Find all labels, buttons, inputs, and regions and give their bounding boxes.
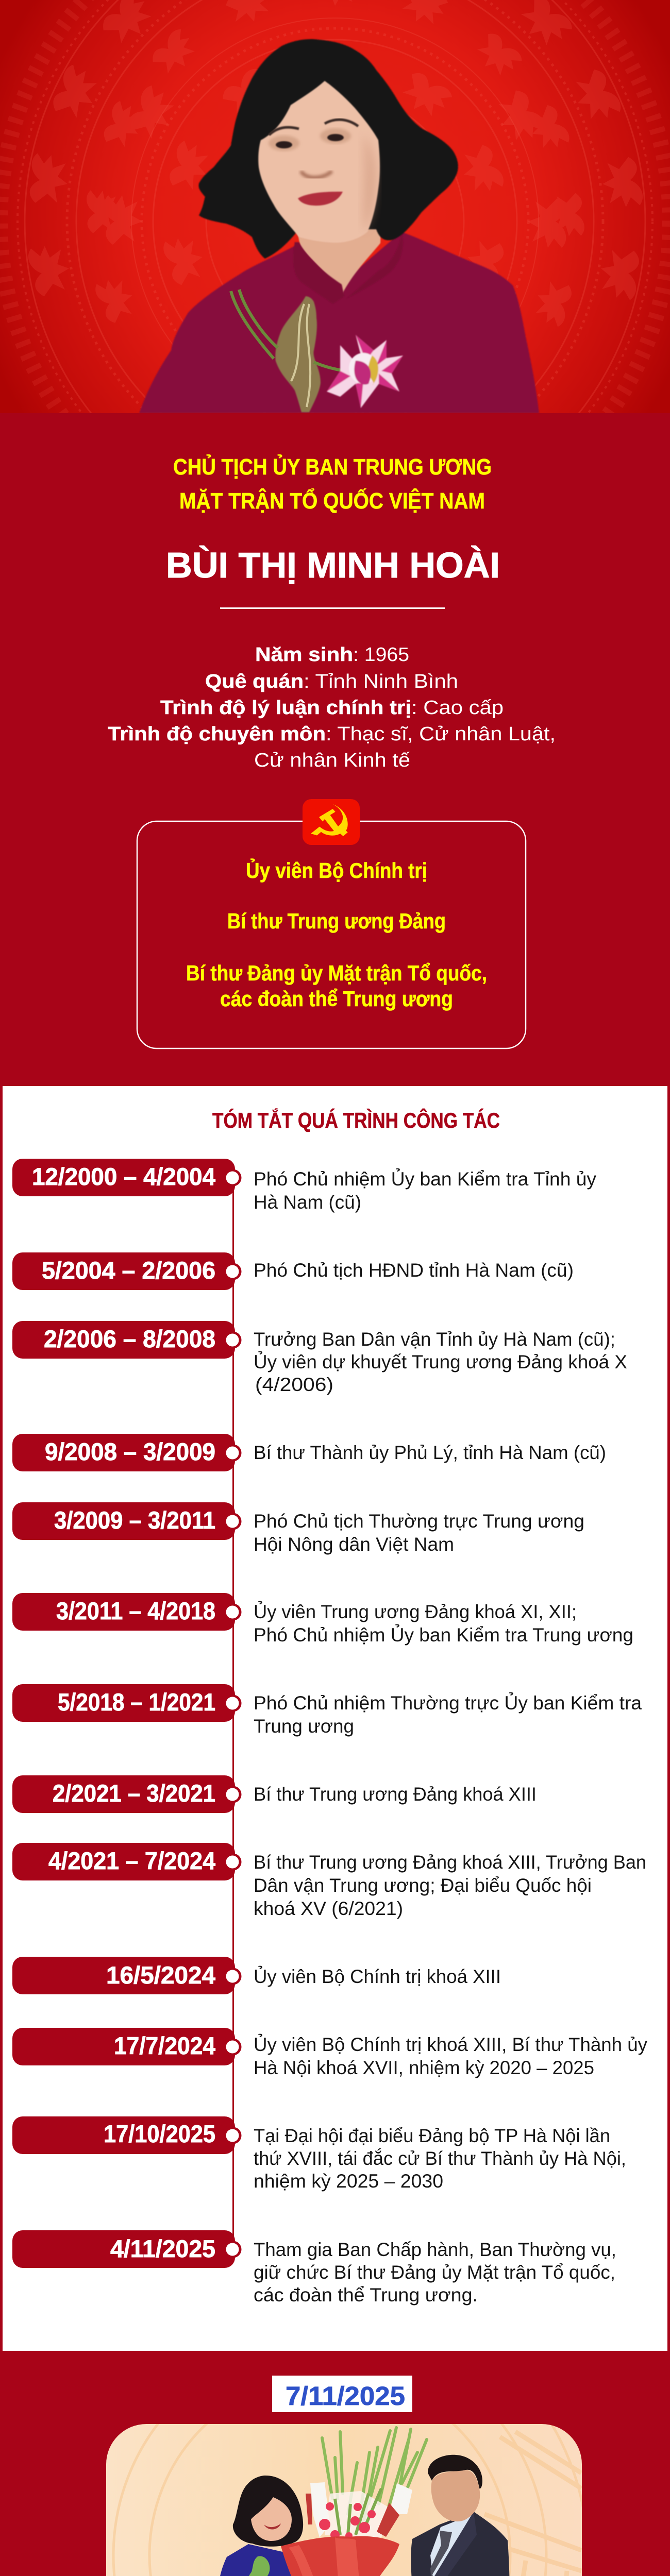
red ribbon wrap	[306, 2494, 399, 2537]
timeline entry 3: Ủy viên dự khuyết Trung ương Đảng khoá X	[254, 1351, 627, 1372]
timeline entry 2: Phó Chủ tịch HĐND tỉnh Hà Nam (cũ)	[254, 1260, 574, 1281]
timeline entry 13: giữ chức Bí thư Đảng ủy Mặt trận Tổ quốc,	[254, 2262, 615, 2283]
timeline entry 3: Trưởng Ban Dân vận Tỉnh ủy Hà Nam (cũ);	[254, 1329, 615, 1350]
date badge: 7/11/2025	[286, 2381, 405, 2411]
timeline entry 9: Dân vận Trung ương; Đại biểu Quốc hội	[254, 1875, 592, 1896]
timeline entry 7	[12, 1684, 642, 1737]
hero portrait panel	[0, 0, 670, 413]
timeline entry 11: Hà Nội khoá XVII, nhiệm kỳ 2020 – 2025	[254, 2057, 594, 2078]
eye sockets	[269, 135, 299, 151]
personal info block: Quê quán	[205, 671, 304, 692]
hair	[199, 39, 458, 259]
timeline entry 8: 2/2021 – 3/2021	[53, 1780, 215, 1807]
gladiolus stems	[322, 2428, 427, 2524]
collar	[293, 232, 403, 304]
personal info block: Trình độ chuyên môn	[108, 723, 326, 745]
man in suit	[355, 2455, 510, 2576]
panel: party positions: Bí thư Trung ương Đảng	[227, 909, 446, 933]
lotus flower	[327, 335, 403, 408]
title: position	[173, 453, 492, 514]
photo: flower presentation	[106, 2424, 582, 2576]
embroidered leaf	[275, 296, 321, 412]
bronze drum pattern	[0, 0, 670, 413]
nose	[301, 171, 332, 178]
timeline entry 13	[12, 2230, 616, 2306]
timeline entry 12: nhiệm kỳ 2025 – 2030	[254, 2171, 443, 2192]
timeline entry 9: 4/2021 – 7/2024	[48, 1847, 215, 1874]
lapel	[433, 2512, 477, 2576]
timeline entry 12: Tại Đại hội đại biểu Đảng bộ TP Hà Nội lần	[254, 2125, 610, 2146]
timeline entry 8: Bí thư Trung ương Đảng khoá XIII	[254, 1784, 537, 1805]
timeline entry 1	[12, 1159, 596, 1213]
face shading	[363, 134, 376, 232]
timeline entry 2	[12, 1252, 574, 1290]
timeline entry 9	[12, 1843, 646, 1919]
timeline entry 12	[12, 2116, 626, 2192]
timeline entry 8	[12, 1775, 537, 1813]
timeline heading: TÓM TẮT QUÁ TRÌNH CÔNG TÁC	[212, 1108, 500, 1132]
timeline entry 6: Phó Chủ nhiệm Ủy ban Kiểm tra Trung ương	[254, 1624, 633, 1646]
title: position: MẶT TRẬN TỔ QUỐC VIỆT NAM	[179, 487, 485, 514]
tie	[430, 2531, 452, 2576]
timeline entry 6: Ủy viên Trung ương Đảng khoá XI, XII;	[254, 1601, 577, 1622]
timeline entry 13: Tham gia Ban Chấp hành, Ban Thường vụ,	[254, 2239, 616, 2260]
timeline entry 3: (4/2006)	[255, 1374, 333, 1395]
face	[251, 2497, 292, 2541]
stems lower	[335, 2488, 381, 2535]
timeline entry 13: 4/11/2025	[110, 2235, 215, 2262]
personal info block: : Thạc sĩ, Cử nhân Luật,	[326, 723, 556, 745]
timeline entry 11: 17/7/2024	[114, 2032, 215, 2059]
personal info block: : Tỉnh Ninh Bình	[304, 671, 458, 692]
timeline entry 10	[12, 1957, 501, 1994]
timeline entry 5: Hội Nông dân Việt Nam	[254, 1534, 454, 1555]
personal info block: Trình độ lý luận chính trị	[160, 697, 411, 719]
panel: career timeline	[3, 1086, 667, 2351]
title: name: BÙI THỊ MINH HOÀI	[166, 545, 500, 585]
white wrapping paper	[310, 2482, 412, 2537]
timeline entry 12: 17/10/2025	[104, 2120, 215, 2147]
neck	[297, 229, 381, 293]
timeline entry 1: Phó Chủ nhiệm Ủy ban Kiểm tra Tỉnh ủy	[254, 1168, 596, 1190]
eyes	[276, 141, 292, 148]
woman portrait	[139, 39, 539, 413]
timeline entry 5	[12, 1502, 584, 1555]
panel: party positions: Bí thư Đảng ủy Mặt trận Tổ quốc,	[186, 961, 487, 985]
face	[431, 2470, 480, 2521]
timeline entry 4	[12, 1434, 606, 1471]
panel: party positions: các đoàn thể Trung ương	[220, 987, 453, 1011]
timeline entry 9: khoá XV (6/2021)	[254, 1898, 403, 1919]
timeline entry 12: thứ XVIII, tái đắc cử Bí thư Thành ủy Hà Nội,	[254, 2148, 626, 2169]
hair	[233, 2476, 303, 2547]
timeline entry 3	[12, 1321, 627, 1395]
pink flowers	[319, 2502, 376, 2539]
timeline entry 6	[12, 1593, 633, 1646]
icon: hammer and sickle	[303, 799, 360, 845]
hair	[428, 2455, 482, 2488]
personal info block: Cử nhân Kinh tế	[254, 750, 410, 771]
timeline entry 6: 3/2011 – 4/2018	[56, 1597, 215, 1624]
eyebrows	[269, 120, 358, 135]
panel: party positions: Ủy viên Bộ Chính trị	[246, 858, 427, 883]
title: position: CHỦ TỊCH ỦY BAN TRUNG ƯƠNG	[173, 453, 492, 480]
shirt	[430, 2514, 473, 2576]
leaf stems	[231, 290, 342, 370]
timeline entry 7: Trung ương	[254, 1716, 354, 1737]
date badge	[272, 2376, 412, 2412]
personal info block: : Cao cấp	[411, 697, 504, 719]
timeline entry 11	[12, 2028, 647, 2078]
timeline entry 11: Ủy viên Bộ Chính trị khoá XIII, Bí thư Thành ủy	[254, 2033, 647, 2055]
timeline entry 1: 12/2000 – 4/2004	[32, 1163, 215, 1190]
personal info block: : 1965	[353, 644, 409, 666]
timeline entry 4: Bí thư Thành ủy Phủ Lý, tỉnh Hà Nam (cũ)	[254, 1442, 606, 1463]
timeline entry 5: Phó Chủ tịch Thường trực Trung ương	[254, 1511, 584, 1532]
timeline entry 10: Ủy viên Bộ Chính trị khoá XIII	[254, 1965, 501, 1987]
timeline entry 3: 2/2006 – 8/2008	[44, 1325, 215, 1352]
woman in blue	[220, 2476, 303, 2576]
timeline entry 7: 5/2018 – 1/2021	[58, 1688, 215, 1716]
dress	[139, 232, 539, 413]
face	[258, 81, 380, 243]
timeline entry 5: 3/2009 – 3/2011	[54, 1506, 215, 1534]
timeline entry 9: Bí thư Trung ương Đảng khoá XIII, Trưởng Ban	[254, 1852, 646, 1873]
green leaf brooch	[247, 2556, 270, 2576]
stage backdrop pattern	[112, 2424, 582, 2576]
personal info block: Năm sinh	[255, 644, 353, 666]
personal info block	[108, 644, 556, 771]
timeline entry 2: 5/2004 – 2/2006	[42, 1257, 215, 1284]
mouth	[298, 192, 343, 206]
timeline entry 10: 16/5/2024	[106, 1961, 215, 1989]
timeline entry 7: Phó Chủ nhiệm Thường trực Ủy ban Kiểm tra	[254, 1692, 642, 1714]
red bouquet	[279, 2536, 399, 2576]
timeline entry 1: Hà Nam (cũ)	[254, 1192, 361, 1213]
timeline entry 13: các đoàn thể Trung ương.	[254, 2284, 478, 2306]
timeline entry 4: 9/2008 – 3/2009	[45, 1438, 215, 1465]
panel: party positions	[137, 799, 526, 1048]
